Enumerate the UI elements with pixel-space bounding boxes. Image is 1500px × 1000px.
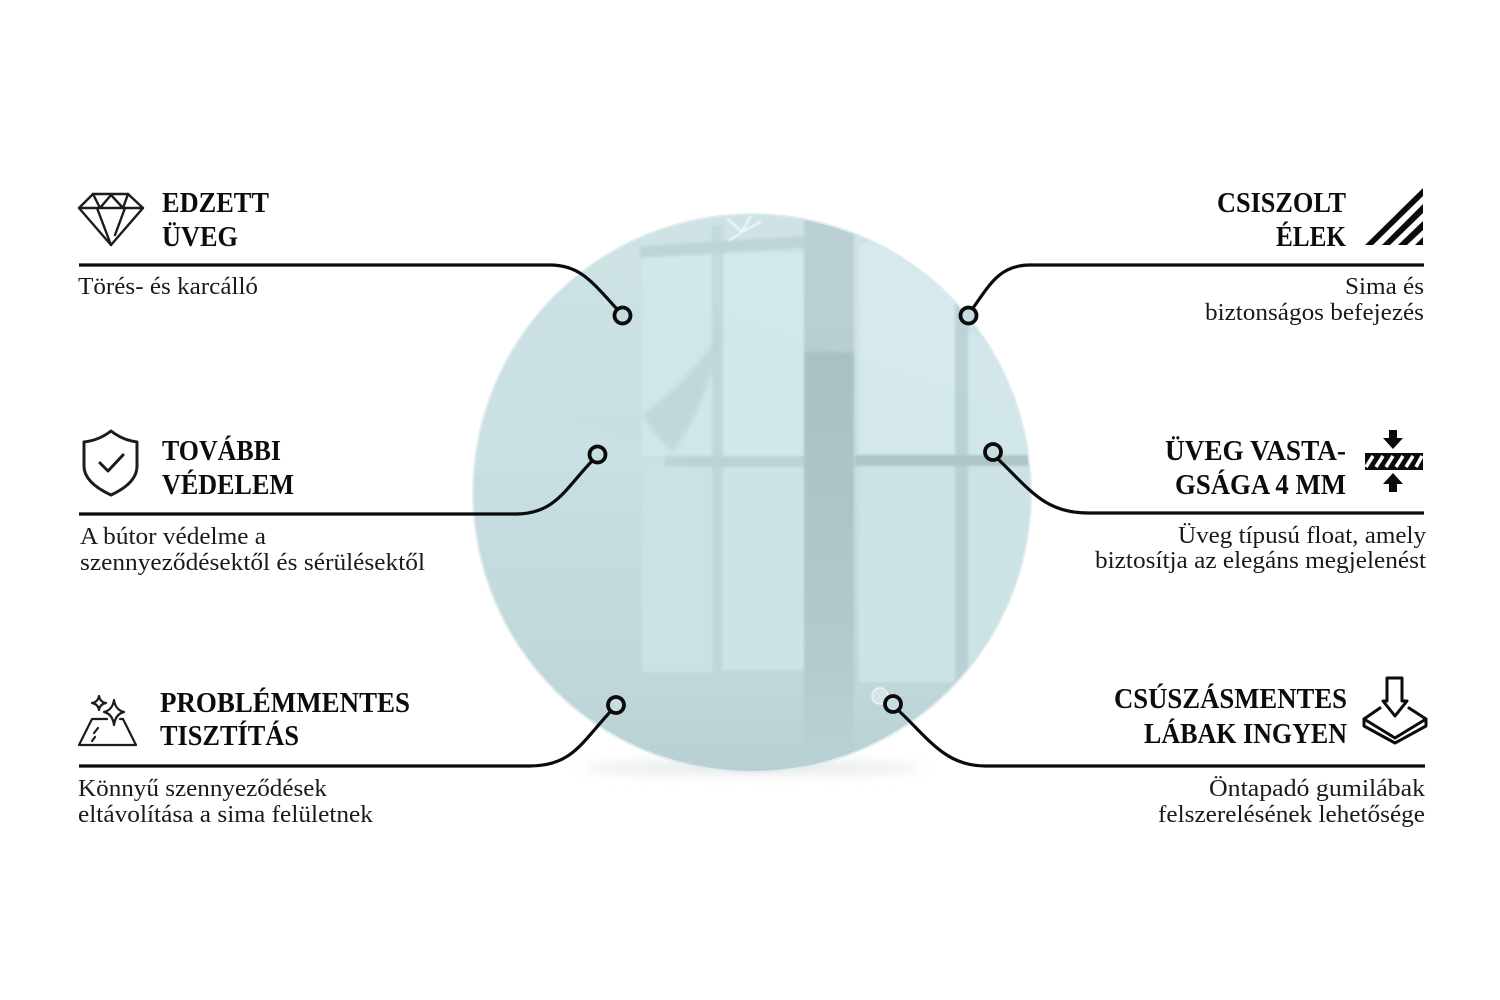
description: A bútor védelme a — [80, 524, 266, 550]
icon: thickness — [1365, 430, 1423, 492]
callout: Üveg vastagsága — [985, 430, 1426, 574]
description: Törés- és karcálló — [78, 274, 258, 300]
glass disc product image — [472, 213, 1032, 776]
heading: VÉDELEM — [162, 470, 294, 501]
connector line — [885, 696, 1425, 766]
heading — [162, 436, 294, 501]
description: biztosítja az elegáns megjelenést — [1095, 548, 1426, 574]
heading: ÜVEG — [162, 222, 238, 253]
description: szennyeződésektől és sérülésektől — [80, 550, 425, 576]
description: felszerelésének lehetősége — [1158, 802, 1425, 828]
callout: Csiszolt élek — [960, 188, 1424, 326]
heading — [162, 188, 269, 253]
connector line — [960, 265, 1424, 324]
callout: További védelem — [79, 431, 606, 576]
heading — [1217, 188, 1346, 253]
top glint — [728, 217, 760, 240]
heading: TOVÁBBI — [162, 436, 281, 467]
feather reflection — [644, 348, 712, 450]
diagonal light overlay — [600, 216, 1032, 420]
heading — [1165, 436, 1346, 501]
icon: polished edge stripes — [1365, 188, 1423, 245]
description — [1095, 523, 1426, 574]
description: biztonságos befejezés — [1205, 300, 1424, 326]
heading: GSÁGA 4 MM — [1175, 470, 1346, 501]
heading: ÉLEK — [1276, 222, 1346, 253]
callout: Edzett üveg — [78, 188, 630, 324]
rubber foot — [872, 688, 888, 704]
description: Sima és — [1345, 274, 1424, 300]
description: Öntapadó gumilábak — [1209, 776, 1425, 802]
connector line — [79, 265, 630, 324]
connector line — [79, 446, 606, 514]
icon: sparkling surface — [79, 696, 136, 745]
heading: EDZETT — [162, 188, 269, 219]
heading: LÁBAK INGYEN — [1144, 719, 1347, 750]
heading — [160, 688, 410, 752]
heading: ÜVEG VASTA- — [1165, 436, 1346, 467]
description: eltávolítása a sima felületnek — [78, 802, 373, 828]
description — [78, 776, 373, 828]
icon: self-adhesive pad — [1364, 678, 1426, 743]
icon: shield — [84, 431, 137, 495]
heading: PROBLÉMMENTES — [160, 688, 410, 719]
icon: diamond — [79, 194, 143, 245]
heading: CSISZOLT — [1217, 188, 1346, 219]
description — [80, 524, 425, 576]
description: Üveg típusú float, amely — [1178, 523, 1426, 549]
description — [1205, 274, 1424, 326]
window reflection — [640, 216, 1032, 776]
description: Könnyű szennyeződések — [78, 776, 327, 802]
heading: CSÚSZÁSMENTES — [1114, 684, 1347, 715]
heading — [1114, 684, 1347, 750]
connector line — [985, 444, 1424, 513]
callout: Csúszásmentes lábak — [885, 678, 1426, 828]
description — [1158, 776, 1425, 828]
callout: Problémmentes tisztítás — [78, 688, 624, 828]
disc floor shadow — [582, 763, 922, 773]
connector line — [79, 697, 624, 766]
heading: TISZTÍTÁS — [160, 721, 299, 752]
